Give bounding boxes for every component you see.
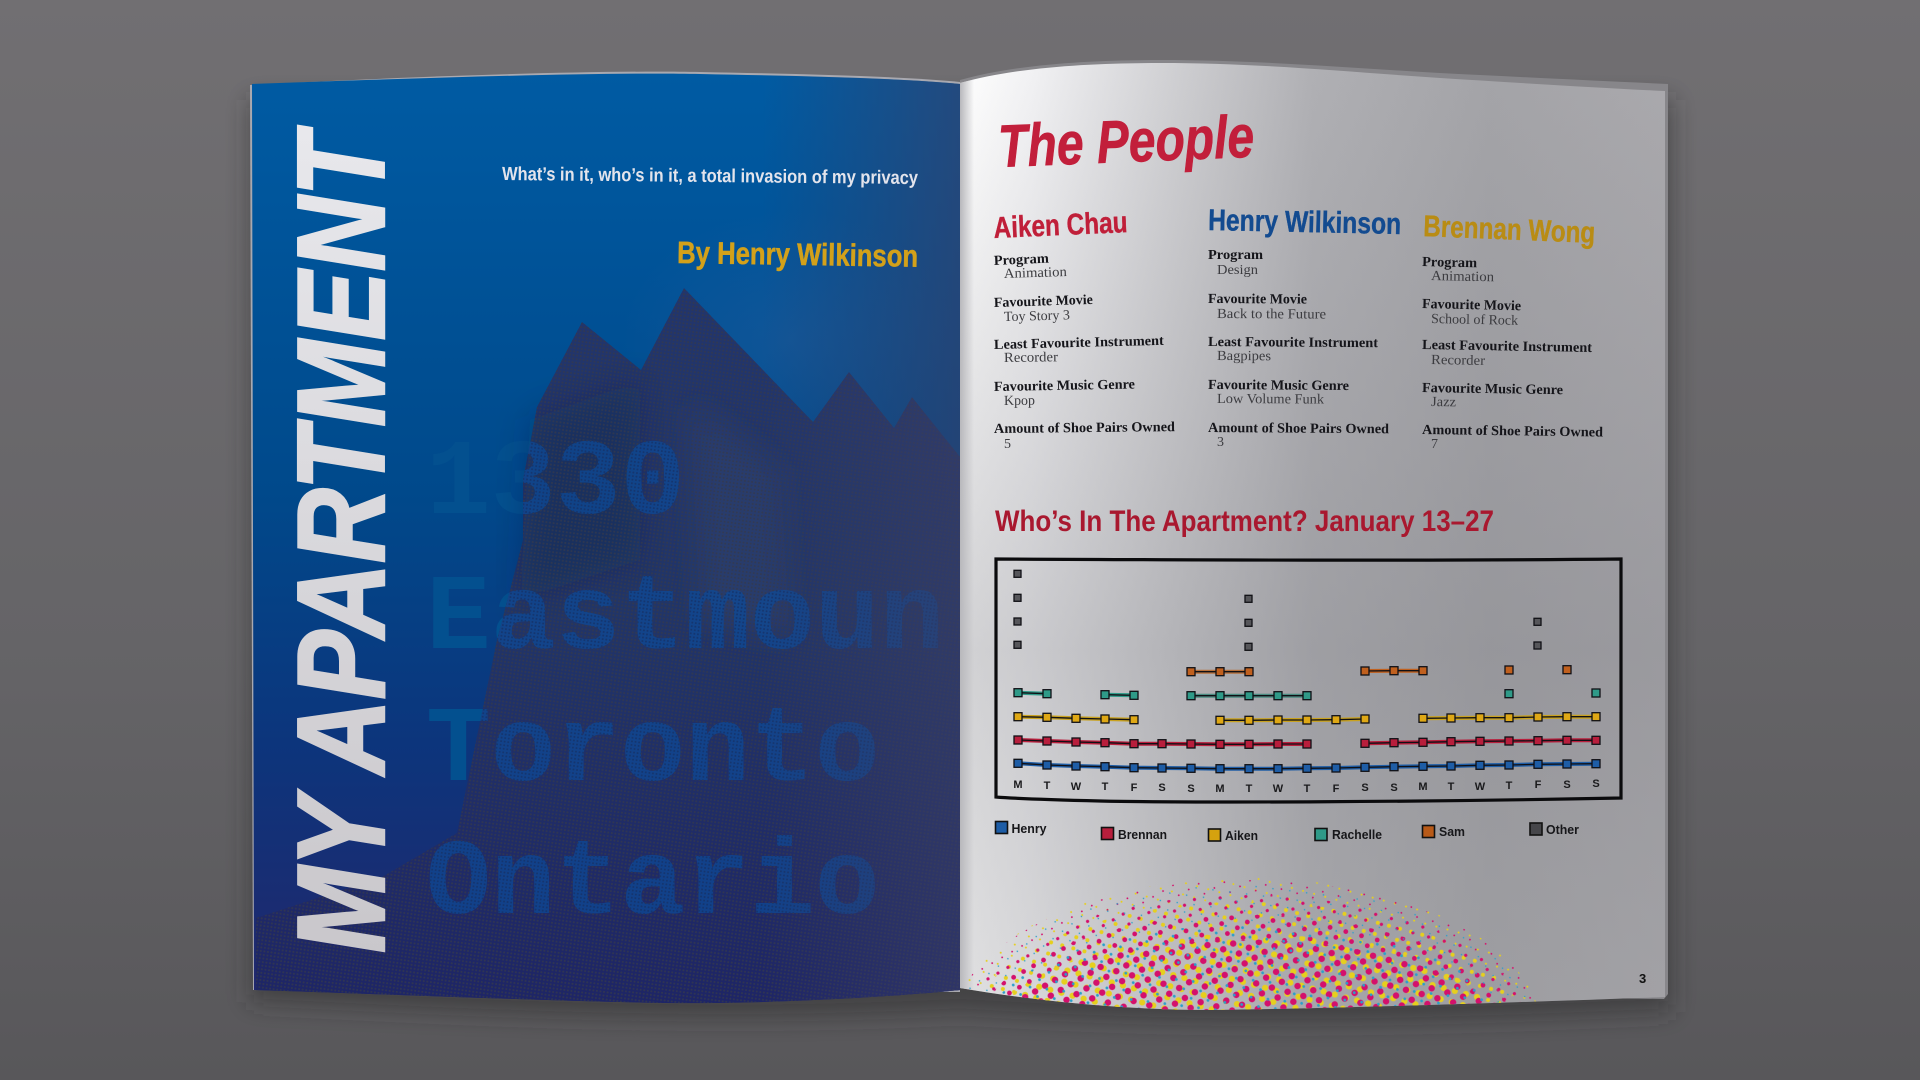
column: Brennan Wong: Recorder (1431, 353, 1486, 369)
chart day labels: S (1158, 782, 1166, 794)
legend (996, 821, 1579, 843)
legend: Aiken (1225, 828, 1258, 843)
column: Brennan Wong: Amount of Shoe Pairs Owned (1422, 423, 1603, 441)
chart day labels: S (1563, 779, 1571, 791)
chart series: Other (1014, 570, 1541, 650)
chart series: Aiken (1014, 713, 1600, 724)
address text over building: Ontario (426, 824, 880, 946)
page background (960, 63, 1665, 1010)
page background (252, 74, 960, 1003)
chart day labels: F (1131, 782, 1138, 794)
building silhouette halftone (256, 288, 960, 1003)
big address text behind building: Eastmoun (426, 559, 944, 681)
chart day labels: T (1304, 783, 1311, 795)
chart day labels (1013, 778, 1600, 795)
legend: Brennan (1118, 827, 1167, 842)
column: Henry Wilkinson: Design (1217, 263, 1258, 278)
title: MY APARTMENT (273, 125, 411, 953)
column: Brennan Wong: Jazz (1431, 395, 1456, 410)
chart day labels: F (1333, 783, 1340, 795)
name: Henry Wilkinson (1208, 204, 1402, 241)
name: Brennan Wong (1423, 210, 1596, 250)
halftone dome (968, 878, 1536, 1010)
column: Aiken Chau: Amount of Shoe Pairs Owned (994, 420, 1175, 437)
column: Aiken Chau: Program (994, 252, 1049, 269)
chart day labels: F (1535, 779, 1542, 791)
chart day labels: M (1013, 779, 1023, 791)
heading: the people: The People (997, 103, 1255, 180)
page number: 3 (1639, 971, 1646, 986)
vertical page shading (960, 63, 1665, 1010)
big address text behind building (429, 505, 522, 780)
legend: Other (1546, 822, 1579, 837)
chart day labels: W (1475, 781, 1486, 793)
legend: Rachelle (1332, 827, 1382, 842)
column: Aiken Chau: Toy Story 3 (1004, 308, 1070, 325)
name: Aiken Chau (993, 206, 1128, 245)
column: Aiken Chau: Kpop (1004, 394, 1035, 409)
chart day labels: S (1361, 782, 1369, 794)
column: Henry Wilkinson: Favourite Movie (1208, 292, 1307, 308)
column: Henry Wilkinson: Least Favourite Instrument (1208, 335, 1378, 351)
book shadow (250, 100, 1672, 1023)
chart day labels: T (1246, 783, 1253, 795)
column: Aiken Chau: Favourite Movie (994, 293, 1093, 311)
spine shadow (960, 80, 972, 990)
back sheet (960, 60, 1668, 999)
column: Henry Wilkinson: Back to the Future (1217, 307, 1326, 323)
column: Brennan Wong: School of Rock (1431, 312, 1518, 329)
chart series: Rachelle (1014, 689, 1600, 700)
soft glow behind building (620, 210, 960, 470)
column: Brennan Wong: Favourite Music Genre (1422, 381, 1563, 398)
column: Aiken Chau: 5 (1004, 437, 1011, 452)
column: Aiken Chau: Recorder (1004, 350, 1058, 366)
column: Henry Wilkinson: 3 (1217, 435, 1224, 450)
column: Brennan Wong: Animation (1431, 269, 1494, 285)
column: Brennan Wong (1422, 210, 1603, 452)
address text over building: Eastmoun (426, 559, 944, 681)
big address text behind building: Toronto (426, 691, 880, 813)
column: Henry Wilkinson: Bagpipes (1217, 349, 1271, 364)
column: Henry Wilkinson: Favourite Music Genre (1208, 378, 1349, 394)
chart day labels: M (1215, 783, 1225, 795)
chart day labels: T (1044, 780, 1051, 792)
byline: By Henry Wilkinson (677, 235, 918, 274)
column: Aiken Chau (993, 206, 1175, 452)
column: Henry Wilkinson: Amount of Shoe Pairs Owned (1208, 421, 1389, 437)
legend: Sam (1439, 824, 1465, 839)
column: Brennan Wong: Program (1422, 255, 1478, 271)
chart day labels: M (1418, 781, 1428, 793)
big address text behind building: Ontario (426, 824, 880, 946)
chart day labels: W (1273, 783, 1284, 795)
address text over building (430, 440, 938, 914)
subtitle: What’s in it, who’s in it, a total invasion of my privacy (502, 164, 918, 189)
chart day labels: S (1592, 778, 1600, 790)
chart series: Brennan (1014, 736, 1600, 748)
address text over building: Toronto (426, 691, 880, 813)
chart day labels: S (1390, 782, 1398, 794)
column: Aiken Chau: Least Favourite Instrument (994, 334, 1164, 353)
column: Henry Wilkinson: Low Volume Funk (1217, 392, 1324, 408)
column: Aiken Chau: Animation (1004, 265, 1067, 282)
column: Henry Wilkinson: Program (1208, 248, 1263, 263)
chart day labels: T (1448, 781, 1455, 793)
column: Brennan Wong: Least Favourite Instrument (1422, 338, 1593, 356)
chart frame (996, 559, 1621, 802)
address text over building: 1330 (426, 424, 685, 546)
column: Henry Wilkinson (1208, 204, 1402, 450)
gutter shading (252, 74, 960, 1003)
chart day labels: T (1506, 780, 1513, 792)
chart day labels: W (1071, 781, 1082, 793)
page edge (250, 72, 960, 992)
chart day labels: T (1102, 781, 1109, 793)
column: Brennan Wong: 7 (1431, 437, 1438, 452)
chart series: Sam (1187, 666, 1571, 676)
panel: left page (250, 72, 960, 1003)
heading: chart title: Who’s In The Apartment? January 13–27 (995, 505, 1494, 538)
big address text behind building: 1330 (426, 424, 685, 546)
chart series: Henry (1014, 759, 1600, 773)
legend: Henry (1012, 821, 1047, 836)
column: Aiken Chau: Favourite Music Genre (994, 378, 1135, 395)
chart day labels: S (1187, 783, 1195, 795)
column: Brennan Wong: Favourite Movie (1422, 297, 1521, 314)
panel: right page (951, 60, 1668, 1030)
